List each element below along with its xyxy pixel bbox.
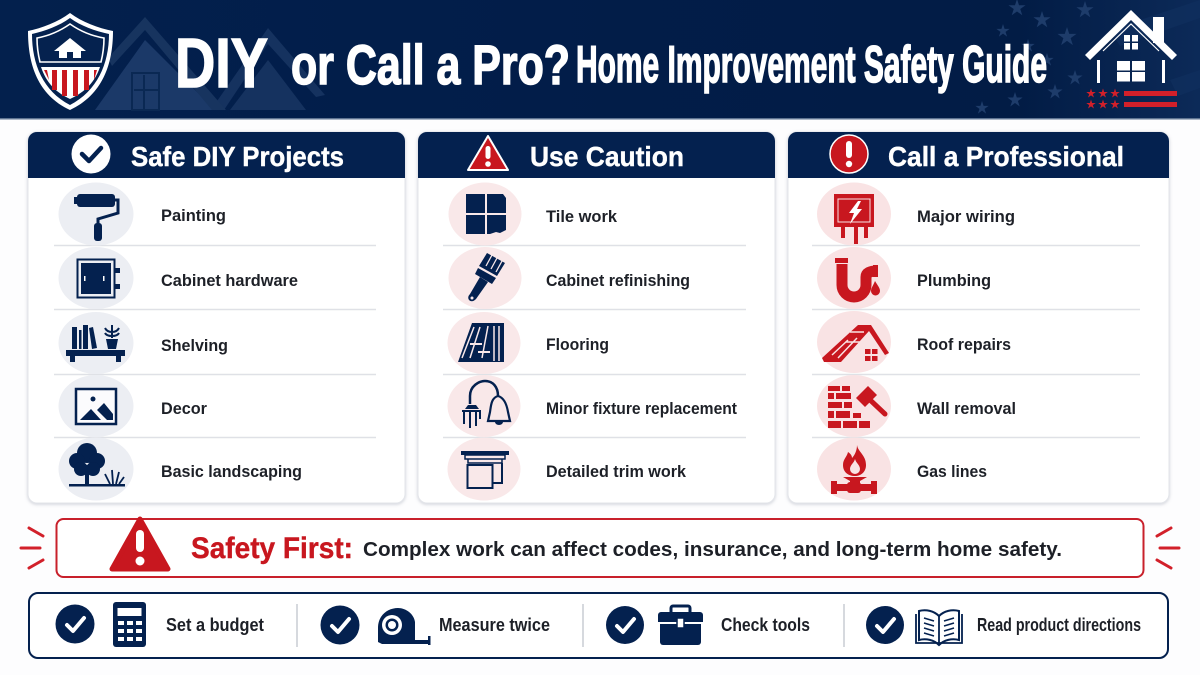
- item: Minor fixture replacement: [448, 375, 737, 437]
- burst lines: left: [21, 528, 43, 568]
- item: Wall removal: [817, 375, 1016, 437]
- item: Major wiring: Major wiring: [917, 207, 1015, 226]
- item: Cabinet refinishing: Cabinet refinishing: [546, 271, 690, 290]
- item: Minor fixture replacement: Minor fixture replacement: [546, 399, 737, 418]
- icon: check badge: [72, 134, 110, 174]
- item: Decor: [58, 375, 207, 437]
- safety heading: Safety First:: [191, 532, 353, 565]
- header banner: [0, 0, 1200, 120]
- flag stars: [975, 0, 1094, 114]
- title: or Call a Pro?: [291, 33, 570, 96]
- item: Plumbing: [817, 247, 991, 309]
- background houses: [95, 17, 325, 110]
- item: Detailed trim work: Detailed trim work: [546, 462, 687, 481]
- heading: Use Caution: Use Caution: [530, 141, 684, 172]
- item: Basic landscaping: Basic landscaping: [161, 462, 302, 481]
- logo shield: [28, 13, 113, 110]
- item: Decor: Decor: [161, 399, 207, 418]
- safety message: Complex work can affect codes, insurance, and long-term home safety.: [363, 538, 1062, 561]
- item: Basic landscaping: [58, 438, 302, 500]
- item: Painting: Painting: [161, 206, 226, 225]
- icon: alert circle: [830, 135, 868, 173]
- icon: house with stars: [1085, 10, 1177, 109]
- item: Painting: [58, 182, 226, 246]
- title: DIY: [175, 24, 268, 102]
- item: Detailed trim work: [448, 438, 687, 500]
- item: Plumbing: Plumbing: [917, 271, 991, 290]
- checklist bar: [29, 593, 1168, 658]
- item: Set a budget: Set a budget: [166, 615, 264, 635]
- item: Roof repairs: [817, 311, 1011, 373]
- icon: warning triangle: [468, 136, 508, 170]
- item: Cabinet refinishing: [448, 247, 690, 309]
- item: Check tools: Check tools: [721, 615, 810, 635]
- item: Cabinet hardware: Cabinet hardware: [161, 271, 298, 290]
- panel: Use Caution: [418, 132, 775, 503]
- item: Tile work: [448, 182, 618, 246]
- item: Flooring: [448, 312, 609, 374]
- callout: Safety First: [56, 519, 1144, 577]
- item: Roof repairs: Roof repairs: [917, 335, 1011, 354]
- item: Measure twice: Measure twice: [439, 615, 550, 635]
- item: Shelving: [58, 312, 228, 374]
- item: Gas lines: Gas lines: [917, 462, 987, 481]
- item: Set a budget: [56, 602, 264, 647]
- item: Read product directions: [866, 606, 1141, 645]
- item: Cabinet hardware: [58, 247, 298, 309]
- item: Wall removal: Wall removal: [917, 399, 1016, 418]
- panel: Call a Professional: [788, 132, 1169, 503]
- panel: Safe DIY Projects: [28, 132, 405, 503]
- item: Tile work: Tile work: [546, 207, 618, 226]
- title: [175, 24, 1047, 102]
- heading: Call a Professional: Call a Professional: [888, 141, 1124, 172]
- burst lines: right: [1157, 528, 1179, 568]
- item: Measure twice: [320, 606, 550, 645]
- flag stripes: [1110, 0, 1200, 96]
- icon: safety warning triangle: [112, 519, 168, 569]
- item: Flooring: Flooring: [546, 335, 609, 354]
- item: Gas lines: [817, 438, 987, 500]
- heading: Safe DIY Projects: Safe DIY Projects: [131, 141, 344, 172]
- item: Read product directions: Read product directions: [977, 615, 1141, 635]
- item: Shelving: Shelving: [161, 336, 228, 355]
- item: Major wiring: [817, 182, 1015, 246]
- item: Check tools: [606, 606, 810, 645]
